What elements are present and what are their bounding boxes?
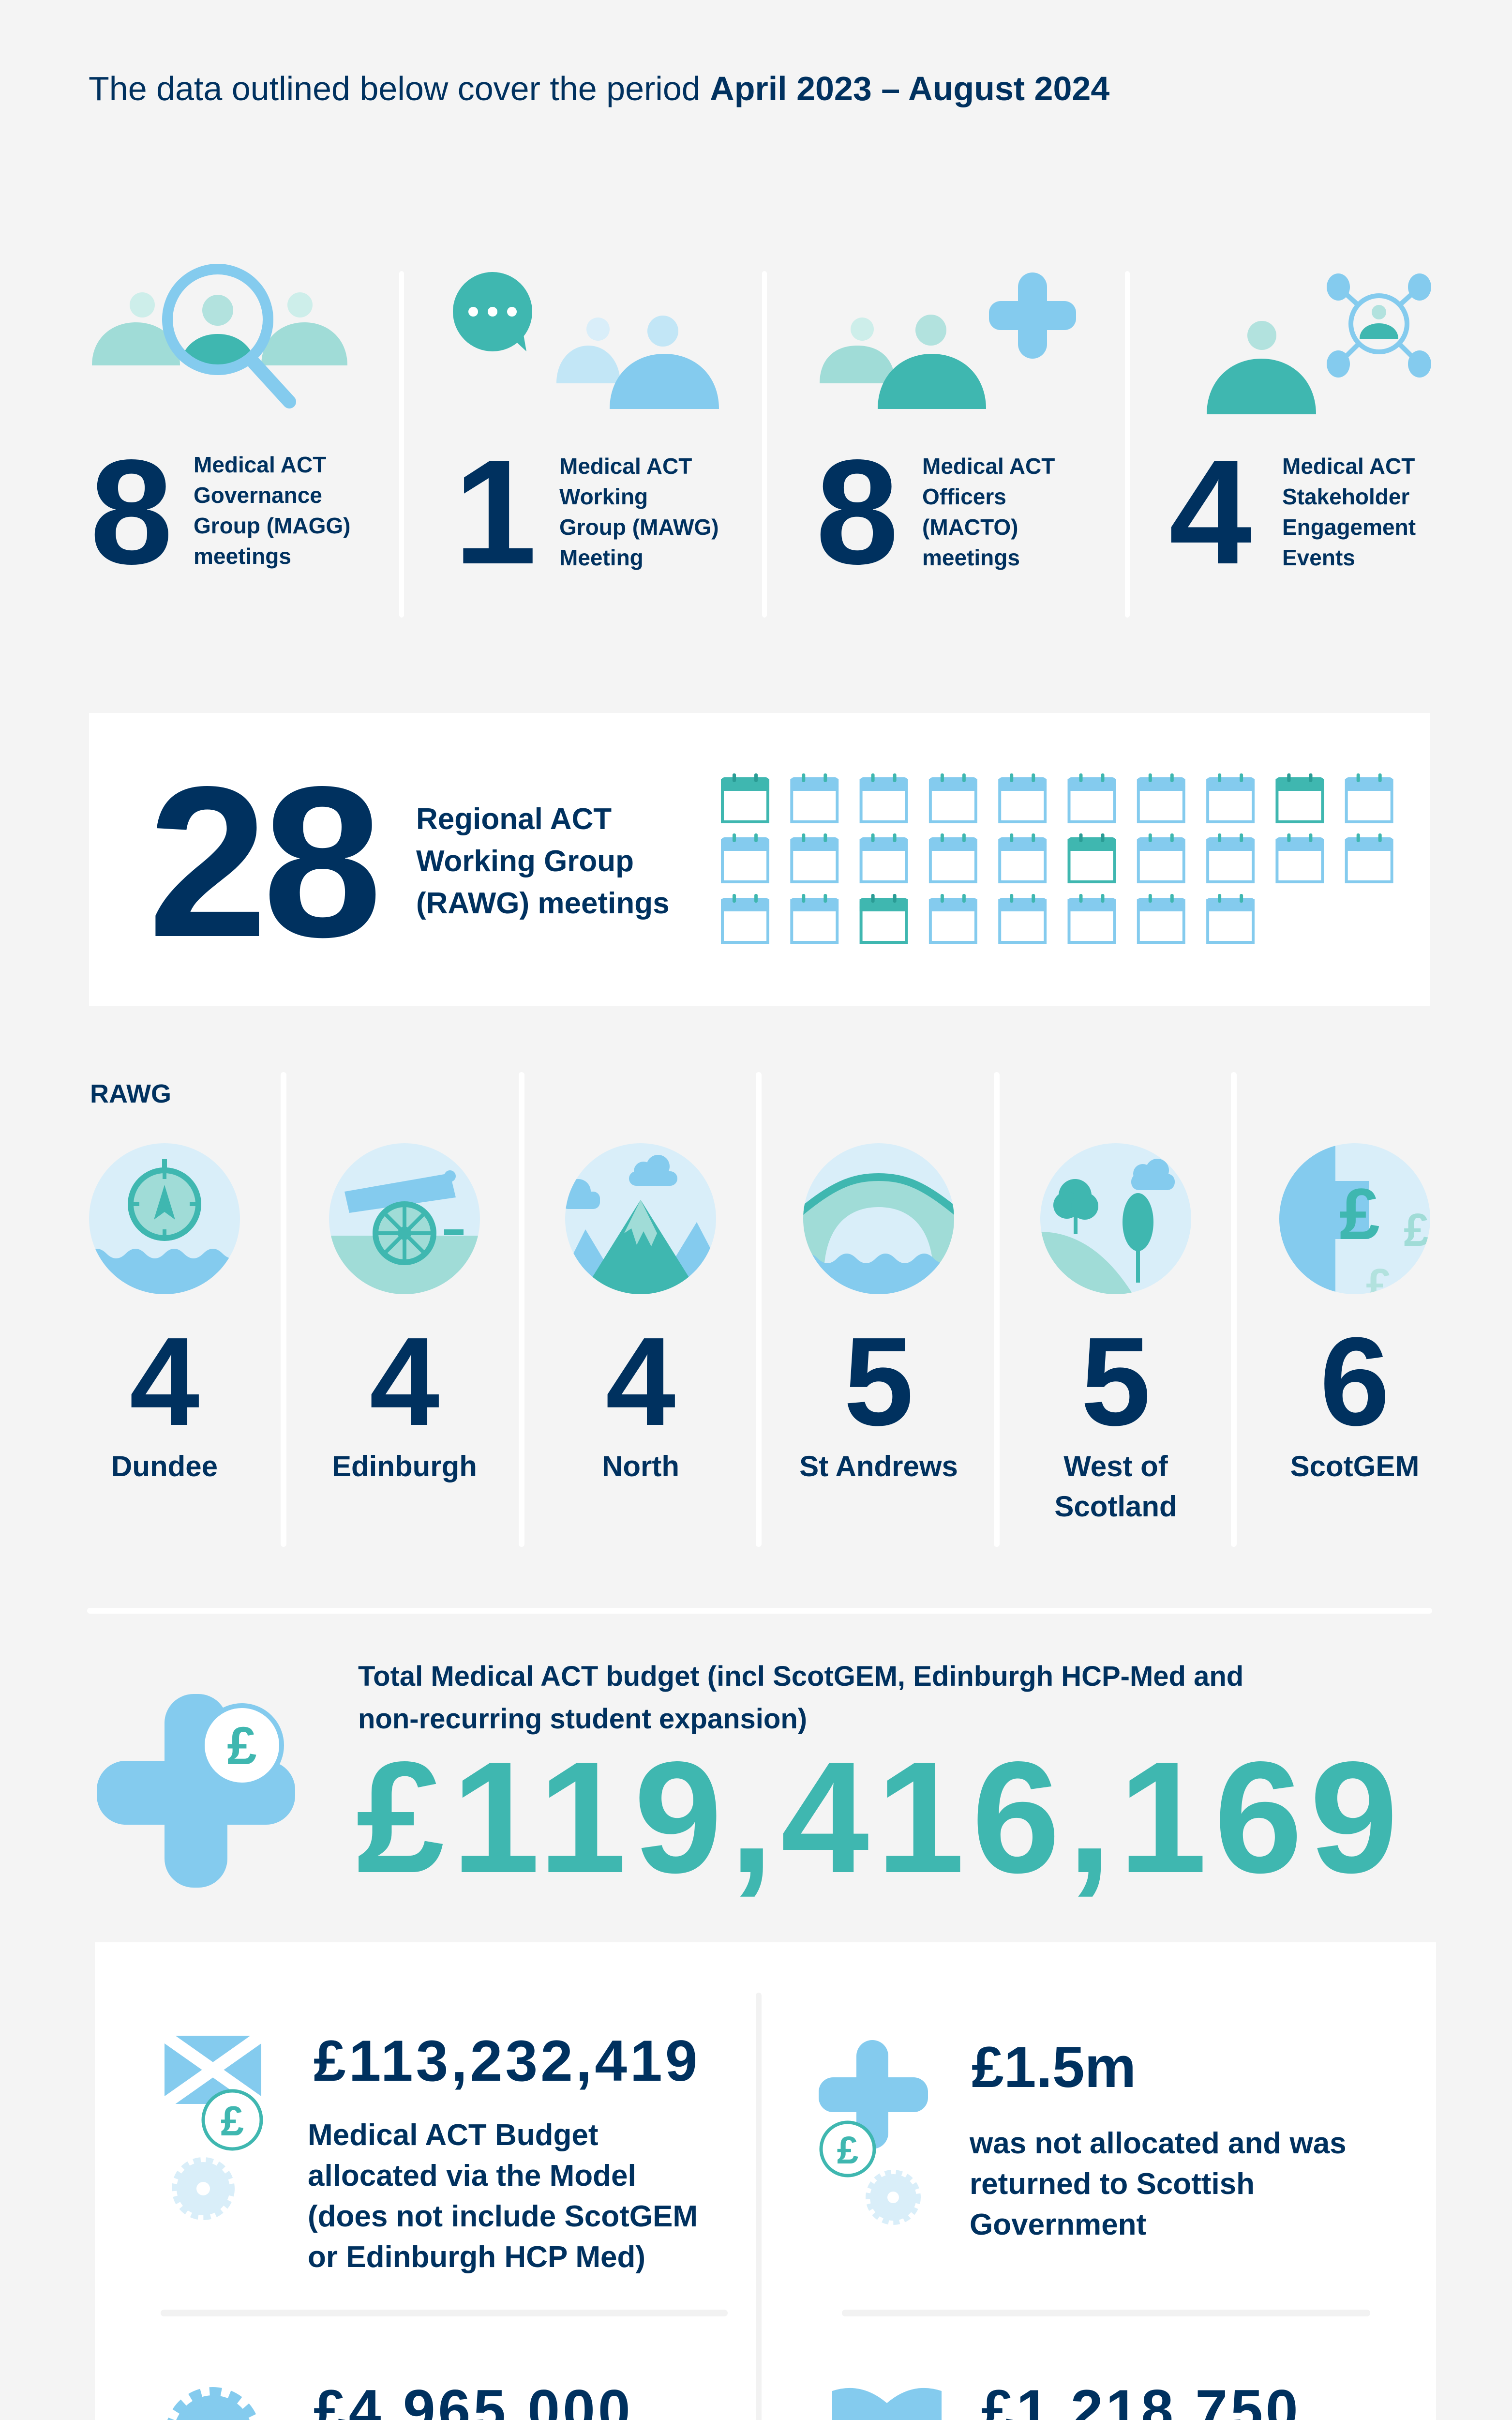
RAWG: West of Scotland [1035, 1143, 1191, 1523]
stat: stakeholder events [1171, 273, 1431, 565]
stat: stakeholder events: Stakeholder [1282, 484, 1409, 509]
budget: not allocated: £1.5m [972, 2035, 1136, 2100]
icon: person and network [1207, 273, 1431, 414]
panel: budget breakdown [95, 1942, 1436, 2420]
stat: MAWG meeting: Meeting [559, 545, 644, 570]
stat: MACTO meetings: (MACTO) [922, 514, 1018, 540]
stat: stakeholder events: Medical ACT [1282, 454, 1415, 479]
icon: people with magnifier [92, 269, 347, 402]
budget: not allocated: Government [970, 2208, 1146, 2241]
stat: MACTO meetings: 8 [816, 429, 898, 595]
stat: MAWG meeting: 1 [454, 429, 537, 595]
RAWG: North [561, 1143, 726, 1482]
budget: via the model: or Edinburgh HCP Med) [308, 2240, 645, 2274]
icon: bridge and water [798, 1143, 959, 1302]
stat: MACTO meetings: Officers [922, 484, 1006, 509]
stat: MACTO meetings: meetings [922, 545, 1020, 570]
budget: not allocated: returned to Scottish [970, 2167, 1255, 2201]
RAWG: ScotGEM: ScotGEM [1290, 1450, 1419, 1482]
stat: MAGG meetings: meetings [194, 544, 291, 569]
label: RAWG meetings: Working Group [416, 845, 634, 878]
icon: plus with coin and gear: £ [837, 2129, 858, 2172]
icon: plus and pounds: £ [1404, 1204, 1430, 1256]
RAWG dividers [281, 1072, 1237, 1547]
icon: trees and hill [1035, 1143, 1191, 1302]
budget: via the model [165, 2028, 700, 2274]
heading: RAWG: RAWG [90, 1079, 171, 1108]
stat: MAGG meetings: Medical ACT [194, 452, 326, 477]
icon: plus with coin [97, 1694, 295, 1888]
RAWG: St Andrews: 5 [844, 1312, 913, 1452]
RAWG: West of Scotland: West of [1063, 1450, 1168, 1482]
RAWG: Dundee: 4 [130, 1312, 200, 1452]
RAWG: St Andrews [798, 1143, 959, 1482]
stat: MAWG meeting: Group (MAWG) [559, 514, 719, 540]
budget: via the model: Medical ACT Budget [308, 2118, 599, 2152]
icon: compass and water [87, 1143, 242, 1297]
icon: plus with coin and gear [819, 2040, 928, 2221]
label: RAWG meetings: Regional ACT [416, 802, 612, 836]
RAWG: ScotGEM [1279, 1143, 1430, 1482]
icon: cannon [329, 1143, 480, 1299]
RAWG: ScotGEM: 6 [1320, 1312, 1390, 1452]
icon grid: calendars [721, 773, 1393, 944]
icon: plus and pounds [1279, 1143, 1430, 1311]
icon: book with coin [832, 2388, 942, 2420]
stat: stakeholder events: Engagement [1282, 514, 1416, 540]
RAWG: Edinburgh: Edinburgh [332, 1450, 477, 1482]
RAWG: West of Scotland: Scotland [1054, 1490, 1177, 1523]
panel: RAWG meetings [89, 713, 1430, 1006]
label: total budget: Total Medical ACT budget (incl ScotGEM, Edinburgh HCP-Med and [358, 1661, 1243, 1692]
stat: MAGG meetings: Group (MAGG) [194, 513, 350, 538]
budget: via the model: (does not include ScotGEM [308, 2200, 698, 2233]
RAWG: Dundee: Dundee [111, 1450, 218, 1482]
stat: MAWG meeting: Working [559, 484, 648, 509]
icon: speech bubble and people [453, 272, 719, 409]
column dividers [399, 271, 1130, 618]
stat: stakeholder events: 4 [1169, 429, 1253, 595]
stat: MAWG meeting: Medical ACT [559, 454, 692, 479]
big number 28: 28 [148, 742, 377, 982]
icon: plus with coin: £ [227, 1716, 257, 1776]
icon: plus and pounds: £ [1339, 1173, 1380, 1255]
budget: via the model: £113,232,419 [314, 2028, 700, 2093]
RAWG: North: North [602, 1450, 679, 1482]
icon: gear with coin [173, 2395, 268, 2420]
title: The data outlined below cover the period April 2023 – August 2024 [89, 70, 1109, 107]
budget: ScotGEM funding [173, 2378, 633, 2420]
icon: saltire with coin and gear [165, 2036, 261, 2215]
RAWG: West of Scotland: 5 [1081, 1312, 1151, 1452]
budget: not allocated [819, 2035, 1347, 2241]
RAWG: Dundee [87, 1143, 242, 1482]
stat: MACTO meetings: Medical ACT [922, 454, 1055, 479]
stat: MAGG meetings: 8 [90, 429, 173, 595]
RAWG: Edinburgh: 4 [370, 1312, 440, 1452]
RAWG: Edinburgh [329, 1143, 480, 1482]
stat: MAGG meetings: Governance [194, 483, 322, 508]
big number: total: £119,416,169 [356, 1728, 1405, 1906]
stat: MAGG meetings [90, 269, 350, 595]
stat: MACTO meetings [816, 272, 1076, 595]
RAWG: St Andrews: St Andrews [799, 1450, 958, 1482]
RAWG: North: 4 [606, 1312, 676, 1452]
label: RAWG meetings: (RAWG) meetings [416, 887, 670, 920]
icon: people and plus [820, 272, 1076, 409]
label: total budget: non-recurring student expansion) [358, 1703, 807, 1735]
stat: stakeholder events: Events [1282, 545, 1355, 570]
budget: not allocated: was not allocated and was [969, 2127, 1347, 2160]
icon: saltire with coin and gear: £ [221, 2098, 244, 2145]
budget: Edinburgh HCP-Med [832, 2378, 1301, 2420]
total budget [97, 1661, 1405, 1906]
budget: via the model: allocated via the Model [308, 2159, 636, 2193]
stat: MAWG meeting [453, 272, 719, 595]
icon: plus and pounds: £ [1366, 1259, 1392, 1311]
icon: mountains [565, 1143, 716, 1294]
